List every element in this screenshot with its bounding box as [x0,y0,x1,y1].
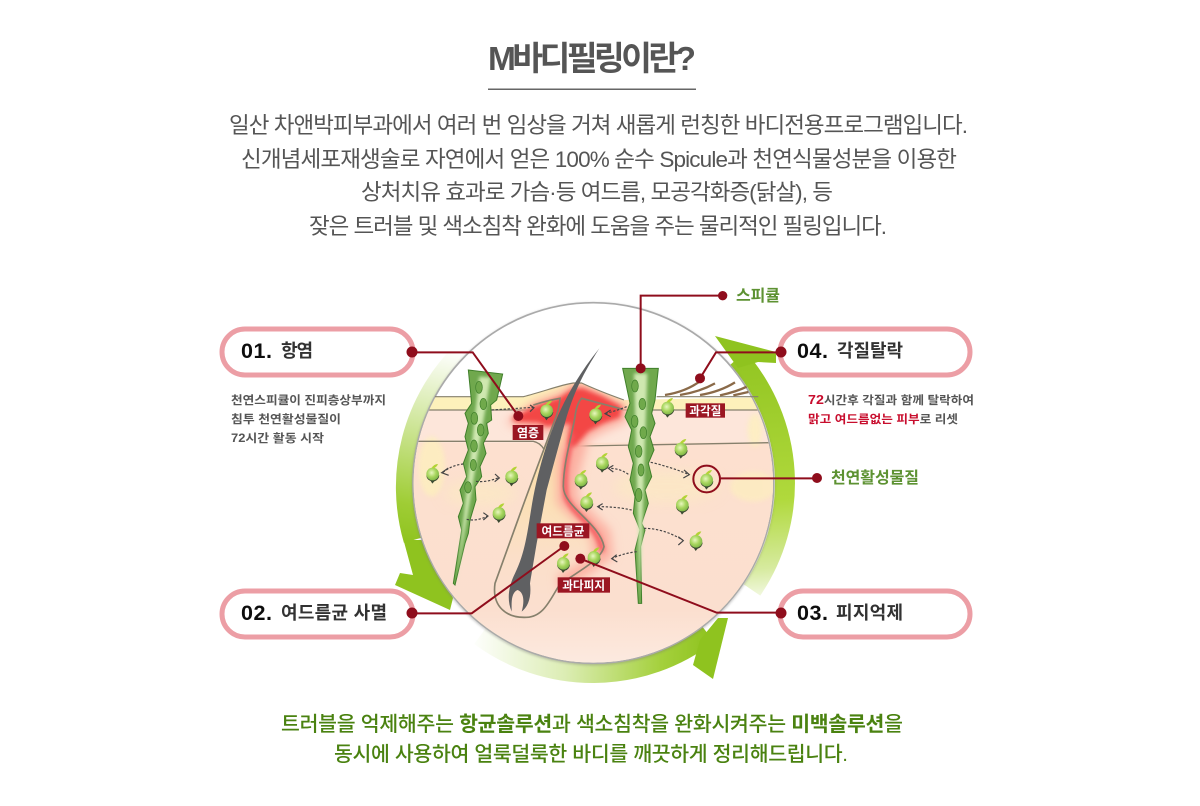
intro text block: 신개념세포재생술로 자연에서 얻은 100% 순수 Spicule과 천연식물성분을 이용한 [241,147,957,172]
description 04: 맑고 여드름없는 피부 로 리셋 [808,412,958,426]
pill: 02 여드름균 사멸: 여드름균 사멸 [281,603,387,623]
pill: 01 항염: 01. [241,339,272,363]
tag: 과다피지 [558,577,610,593]
active ingredient particles [426,398,713,573]
pill: 02 여드름균 사멸: 02. [241,601,272,625]
tag: 염증 [513,425,543,440]
intro text block [229,113,968,239]
dead skin flakes [665,380,748,395]
tag: 여드름균: 여드름균 [542,524,585,538]
pill: 03 피지억제: 피지억제 [836,603,903,623]
description 01: 72시간 활동 시작 [231,431,324,445]
intro text block: 잦은 트러블 및 색소침착 완화에 도움을 주는 물리적인 필링입니다. [309,214,887,239]
pill: 03 피지억제: 03. [797,601,828,625]
tag: 과각질: 과각질 [689,404,721,418]
tag: 과다피지: 과다피지 [562,578,605,592]
skin layers [414,384,773,663]
callout lines [413,291,817,613]
description 04: 72시간후 각질과 함께 탈락하여 [808,392,974,407]
cycle arrow: bottom green arc [480,618,728,679]
label: 천연활성물질: 천연활성물질 [831,469,919,487]
follicle wall [495,398,623,617]
title: M바디필링이란? [488,41,696,78]
skin surface [435,383,758,400]
pill: 04 각질탈락: 각질탈락 [837,341,903,361]
skin cross-section circle [411,302,776,666]
intro text block: 일산 차앤박피부과에서 여러 번 임상을 거쳐 새롭게 런칭한 바디전용프로그램입니다. [229,113,968,138]
pill: 01 항염: 항염 [281,341,313,361]
closing green text: 동시에 사용하여 얼룩덜룩한 바디를 깨끗하게 정리해드립니다. [334,743,848,766]
description 01: 천연스피큘이 진피층상부까지 [231,393,386,407]
closing green text: 트러블을 억제해주는 항균솔루션과 색소침착을 완화시켜주는 미백솔루션을 [281,713,903,736]
description 01 [231,393,386,445]
pill: 01 항염 [222,329,418,375]
pill: 04 각질탈락 [776,329,970,375]
pill: 04 각질탈락: 04. [797,339,828,363]
pill: 03 피지억제 [776,591,970,637]
closing green text [281,713,903,766]
spicule right [623,368,658,603]
description 01: 침투 천연활성물질이 [231,412,341,426]
hair [509,348,599,612]
description 04 [808,392,974,426]
cycle arrow: right green arc [715,336,785,590]
pill: 02 여드름균 사멸 [222,591,418,637]
hair follicle with inflammation [435,348,758,617]
inflammation [507,382,628,590]
tag: 염증: 염증 [517,426,539,440]
spicule left [453,370,503,585]
follicle fill [495,398,604,617]
cycle arrow: left green arc [395,352,462,610]
label: 스피큘: 스피큘 [736,287,780,305]
dotted diffusion arrows [442,405,689,562]
intro text block: 상처치유 효과로 가슴·등 여드름, 모공각화증(닭살), 등 [361,180,833,205]
